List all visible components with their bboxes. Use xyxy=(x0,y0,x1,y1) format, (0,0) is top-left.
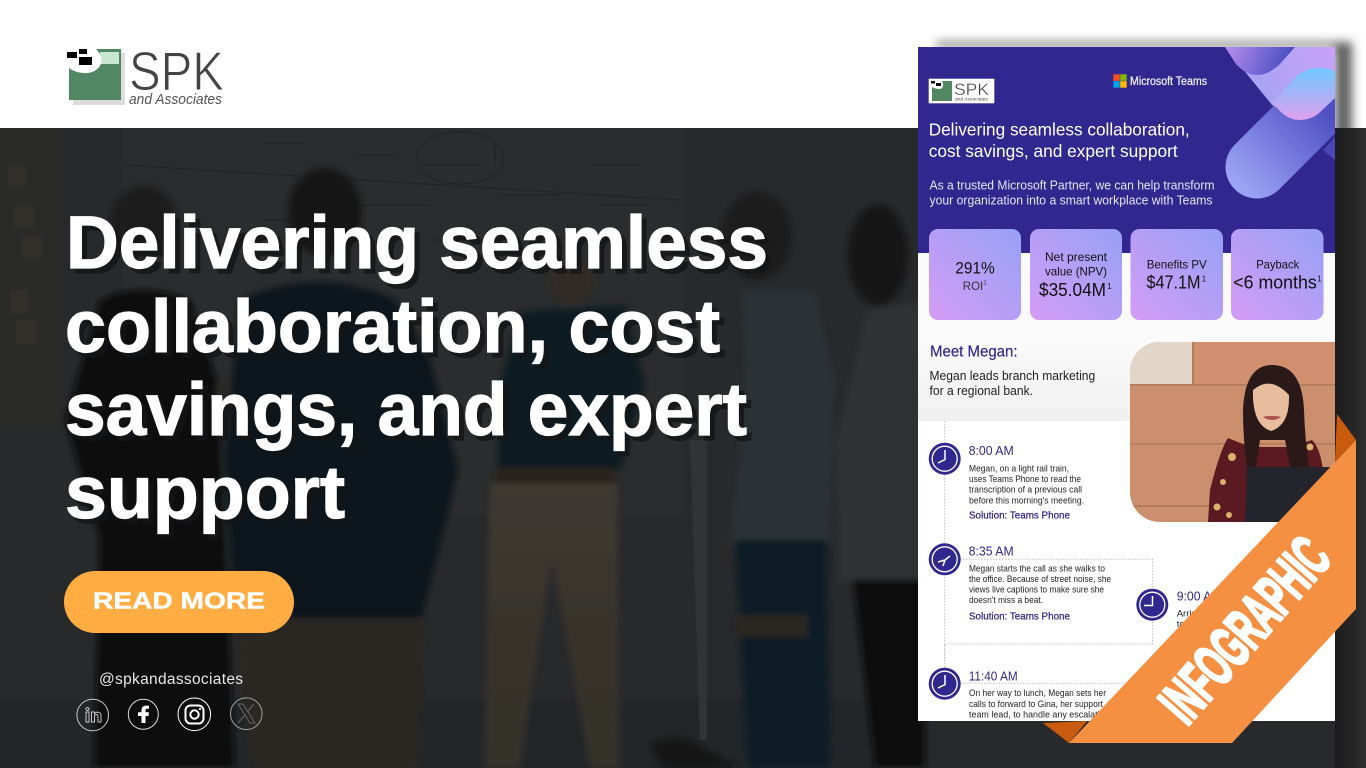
stat: Payback: Payback xyxy=(1256,258,1300,272)
title: savings, and expert xyxy=(70,373,752,456)
event: 8:35 AM: 8:35 AM xyxy=(969,544,1014,559)
card intro text: your organization into a smart workplace with Teams xyxy=(930,194,1212,208)
social handle: @spkandassociates xyxy=(99,671,243,688)
stat: ROI xyxy=(929,229,1021,320)
icon: x xyxy=(230,698,262,730)
event: 9:00 AM: to xyxy=(1177,619,1185,630)
title: Delivering seamless xyxy=(66,201,768,284)
icon: linkedin xyxy=(77,699,108,731)
stat: Payback: <6 months xyxy=(1233,272,1317,292)
mini SPK logo: and Associates xyxy=(955,96,989,102)
icon: clock 9:00 xyxy=(1136,589,1168,621)
person 1 xyxy=(111,186,177,258)
stat: ROI: ROI xyxy=(963,281,983,293)
purple header panel xyxy=(918,47,1345,253)
infographic corner ribbon xyxy=(1043,414,1356,743)
person 5 xyxy=(848,205,908,305)
title: collaboration, cost xyxy=(70,290,725,373)
stat: NPV xyxy=(1030,229,1122,320)
card heading xyxy=(929,120,1190,161)
stat: NPV: $35.04M xyxy=(1039,280,1106,300)
card heading: Delivering seamless collaboration, xyxy=(929,120,1190,140)
icon: instagram xyxy=(178,698,211,731)
Meet Megan panel: for a regional bank. xyxy=(930,384,1033,398)
decorative ribbons xyxy=(1225,47,1345,167)
logo: SPK and Associates xyxy=(67,40,224,108)
event: 8:00 AM: transcription of a previous call xyxy=(969,484,1082,496)
event: 11:40 AM: On her way to lunch, Megan sets her xyxy=(969,688,1106,699)
event: 8:35 AM: doesn't miss a beat. xyxy=(969,595,1043,606)
event: 11:40 AM: calls to forward to Gina, her support xyxy=(969,699,1103,710)
event: 11:40 AM: team lead, to handle any escalations xyxy=(969,710,1114,720)
person 3 xyxy=(550,260,594,304)
event: 8:00 AM: 8:00 AM xyxy=(969,443,1014,458)
Microsoft Teams logo: Microsoft Teams xyxy=(1130,76,1207,88)
Microsoft Teams logo xyxy=(1113,74,1207,88)
card heading: cost savings, and expert support xyxy=(929,141,1178,161)
logo: SPK and Associates: SPK xyxy=(129,40,224,102)
event: 8:00 AM: Megan, on a light rail train, xyxy=(969,464,1069,474)
Meet Megan panel: Megan leads branch marketing xyxy=(930,369,1095,383)
stat: NPV: 1 xyxy=(1107,282,1112,291)
event: 8:35 AM xyxy=(929,543,1111,622)
title: support xyxy=(65,451,345,534)
card intro text xyxy=(930,178,1214,208)
logo: SPK and Associates: and Associates xyxy=(129,92,222,108)
stat: ROI: 291% xyxy=(955,260,995,278)
title: savings, and expert xyxy=(65,368,747,451)
event: 8:00 AM: Solution: Teams Phone xyxy=(969,511,1070,522)
icon: clock 11:40 xyxy=(929,668,961,700)
title xyxy=(65,201,773,539)
stat: NPV: value (NPV) xyxy=(1045,265,1107,279)
stat: ROI: 1 xyxy=(983,280,987,286)
stat: Benefits PV: $47.1M xyxy=(1146,272,1200,292)
event: 8:00 AM xyxy=(929,443,1084,522)
read more button xyxy=(64,571,294,633)
stat: Benefits PV: 1 xyxy=(1202,274,1207,284)
event: 11:40 AM xyxy=(929,668,1114,720)
stat: Payback: 1 xyxy=(1317,274,1322,284)
photo of Megan xyxy=(1130,342,1335,522)
stat: Payback xyxy=(1231,229,1324,320)
stat: Benefits PV: Benefits PV xyxy=(1147,258,1207,272)
title: collaboration, cost xyxy=(65,285,720,368)
person 4 xyxy=(722,192,792,280)
icon: clock 8:35 xyxy=(929,543,961,575)
Meet Megan panel: Meet Megan: xyxy=(930,344,1018,361)
event: 9:00 AM: 9:00 AM xyxy=(1177,589,1222,604)
card intro text: As a trusted Microsoft Partner, we can help transform xyxy=(930,178,1214,192)
event: 11:40 AM: 11:40 AM xyxy=(969,668,1018,683)
event: 9:00 AM: Arrives xyxy=(1177,609,1207,620)
event: 8:35 AM: Megan starts the call as she walks to xyxy=(969,564,1105,575)
event: 8:35 AM: Solution: Teams Phone xyxy=(969,611,1070,622)
top white band xyxy=(0,0,1366,128)
mini SPK logo xyxy=(929,79,994,103)
title: Delivering seamless xyxy=(71,206,773,289)
mini SPK logo: SPK xyxy=(954,80,990,99)
read more button: READ MORE xyxy=(93,588,265,614)
social icons xyxy=(77,698,262,731)
stat: NPV: Net present xyxy=(1045,250,1108,264)
timeline connectors xyxy=(945,421,1160,683)
icon: facebook xyxy=(128,699,158,729)
event: 8:00 AM: before this morning's meeting. xyxy=(969,496,1084,506)
stats band background xyxy=(918,253,1335,343)
event: 8:00 AM: uses Teams Phone to read the xyxy=(969,474,1081,485)
infographic card drop shadow xyxy=(936,42,1352,140)
event: 8:35 AM: the office. Because of street noise, she xyxy=(969,574,1111,585)
stat: Benefits PV xyxy=(1130,229,1223,320)
infographic preview card xyxy=(918,47,1345,721)
event: 8:35 AM: views live captions to make sure she xyxy=(969,584,1104,596)
person 2 xyxy=(288,168,362,256)
title: support xyxy=(70,456,350,539)
event: 9:00 AM xyxy=(1136,588,1210,627)
icon: clock 8:00 xyxy=(929,443,961,475)
Meet Megan panel xyxy=(918,345,1130,421)
